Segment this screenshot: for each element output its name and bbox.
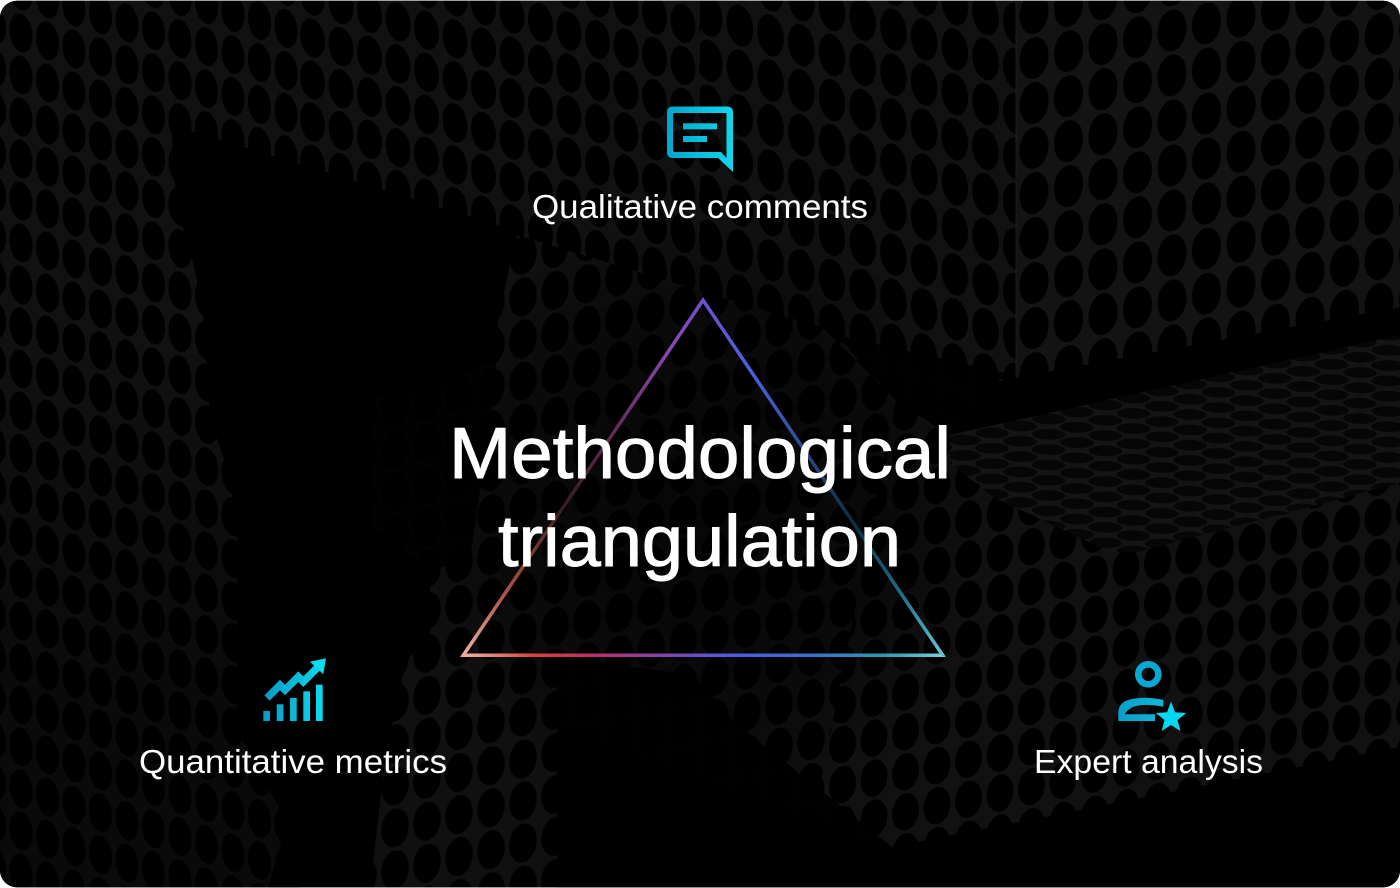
label: qualitative comments: Qualitative comments <box>532 188 868 225</box>
icon: rising bar chart with arrow <box>263 658 326 721</box>
triangle with gradient outline <box>460 297 946 657</box>
label: quantitative metrics: Quantitative metrics <box>139 743 447 780</box>
title: triangulation <box>498 502 901 582</box>
icon: chat comment bubble <box>667 106 733 172</box>
icon: person with star <box>1118 664 1186 731</box>
title: Methodological <box>449 414 951 494</box>
title <box>449 414 951 582</box>
label: expert analysis: Expert analysis <box>1034 743 1263 780</box>
